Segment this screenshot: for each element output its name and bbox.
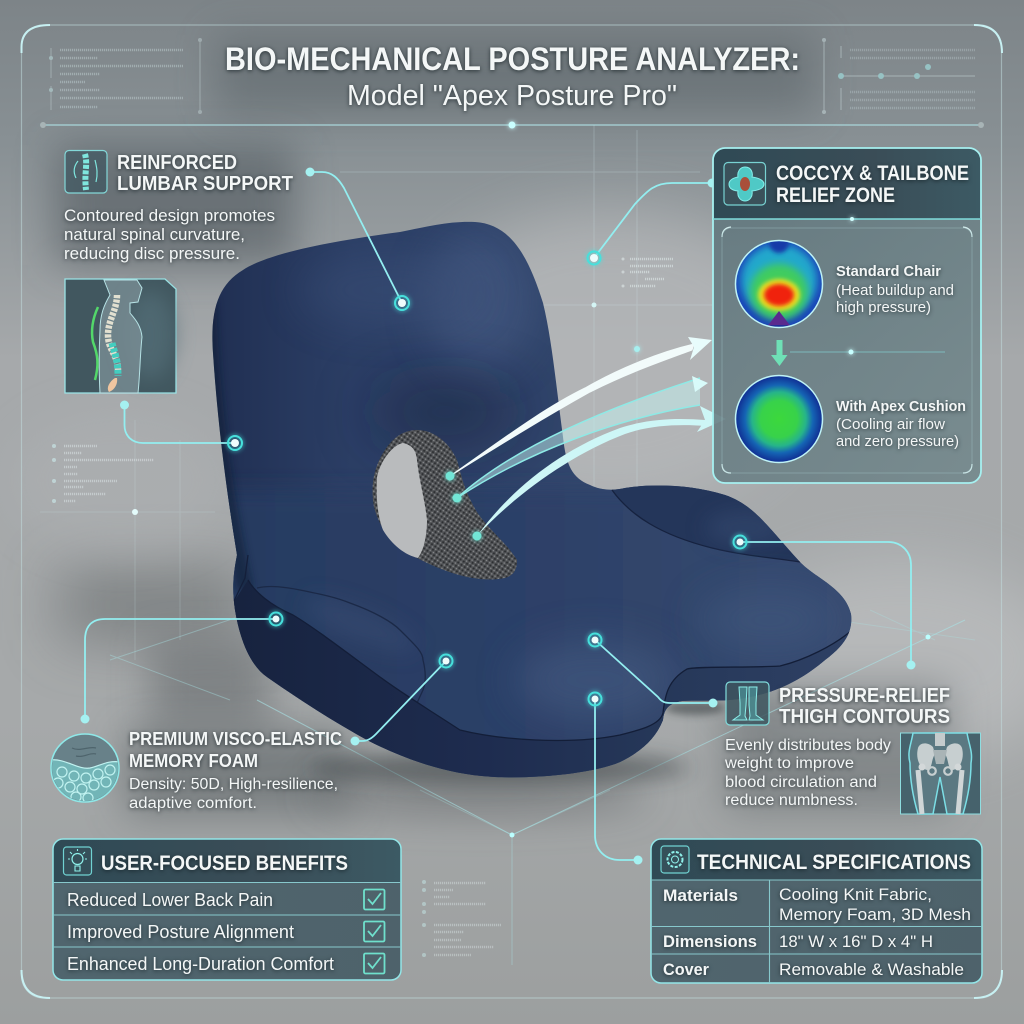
micro data block: upper right of chair (622, 258, 673, 288)
callout: reinforced lumbar support: Contoured design promotes (64, 207, 275, 225)
icon: gear (661, 846, 689, 873)
mesh cutout (373, 430, 517, 579)
arrow: upper white airflow (450, 337, 712, 476)
panel: technical specifications: Memory Foam, 3D Mesh (779, 905, 971, 924)
panel: coccyx and tailbone relief zone (713, 148, 981, 483)
micro data block: bottom centre (422, 880, 501, 957)
grid lines and floor guide lines (40, 125, 975, 965)
icon: legs (726, 682, 769, 725)
micro data block: top left (49, 38, 202, 114)
callout: pressure-relief thigh contours (724, 682, 980, 814)
micro data block: top right (822, 38, 975, 114)
panel: technical specifications: Materials (663, 886, 738, 905)
panel: user-focused benefits: Enhanced Long-Duration Comfort (67, 954, 334, 974)
callout: premium memory foam (50, 729, 342, 812)
callout: reinforced lumbar support: reducing disc pressure. (64, 245, 240, 263)
connector lines (85, 172, 911, 860)
product: seat cushion chair (200, 222, 900, 800)
panel: coccyx and tailbone relief zone: RELIEF ZONE (776, 184, 895, 207)
panel: user-focused benefits (53, 839, 401, 980)
panel: technical specifications: Cover (663, 960, 709, 979)
illustration: spine side view (65, 279, 176, 393)
callout: premium memory foam: PREMIUM VISCO-ELASTIC (129, 729, 342, 749)
callout: reinforced lumbar support: natural spinal curvature, (64, 226, 245, 244)
icon: tailbone zone (724, 162, 766, 205)
icon: light bulb (64, 847, 92, 875)
arrow origin points (446, 472, 482, 540)
callout: reinforced lumbar support: REINFORCED (117, 152, 237, 174)
callout: pressure-relief thigh contours: reduce numbness. (725, 792, 858, 809)
divider glow (790, 350, 945, 354)
callout: premium memory foam: Density: 50D, High-resilience, (129, 776, 338, 793)
title: Model "Apex Posture Pro" (347, 80, 677, 112)
title (225, 41, 800, 112)
panel: coccyx and tailbone relief zone: (Heat buildup and (836, 283, 954, 299)
panel: technical specifications (651, 839, 982, 983)
panel: technical specifications: Removable & Washable (779, 960, 964, 979)
panel: user-focused benefits: Reduced Lower Back Pain (67, 890, 273, 910)
illustration: pelvis x-ray (900, 733, 980, 814)
panel: coccyx and tailbone relief zone: and zero pressure) (836, 434, 959, 450)
callout: premium memory foam: MEMORY FOAM (129, 751, 258, 771)
panel: coccyx and tailbone relief zone: (Cooling air flow (836, 417, 946, 433)
callout: pressure-relief thigh contours: THIGH CONTOURS (779, 706, 950, 728)
micro data block: left middle (52, 444, 154, 503)
panel: user-focused benefits: USER-FOCUSED BENEFITS (101, 852, 348, 875)
title: BIO-MECHANICAL POSTURE ANALYZER: (225, 41, 800, 77)
arrow: lower cyan airflow (477, 406, 726, 536)
panel: technical specifications: TECHNICAL SPECIFICATIONS (697, 851, 971, 874)
panel: coccyx and tailbone relief zone: high pressure) (836, 300, 931, 316)
icon: foam layers (50, 734, 120, 805)
arrow: translucent airflow band (457, 376, 708, 498)
heat map: standard chair (734, 240, 824, 328)
panel: technical specifications: 18" W x 16" D x 4" H (779, 932, 933, 951)
panel: user-focused benefits: Improved Posture Alignment (67, 922, 294, 942)
icon: spine (65, 150, 107, 193)
callout: reinforced lumbar support: LUMBAR SUPPORT (117, 173, 293, 195)
glowing hotspots (80, 168, 916, 864)
callout: pressure-relief thigh contours: blood circulation and (725, 774, 877, 791)
heat map: with apex cushion (736, 376, 822, 462)
icon: check boxes (364, 890, 384, 974)
airflow arrows (446, 337, 726, 540)
arrow: standard to cushion (771, 340, 788, 366)
callout: pressure-relief thigh contours: Evenly distributes body (725, 737, 891, 754)
callout: reinforced lumbar support (64, 150, 293, 393)
panel: technical specifications: Dimensions (663, 932, 757, 951)
callout: pressure-relief thigh contours: weight to improve (724, 755, 854, 772)
panel: coccyx and tailbone relief zone: With Apex Cushion (836, 399, 966, 415)
callout: pressure-relief thigh contours: PRESSURE-RELIEF (779, 685, 950, 707)
panel: coccyx and tailbone relief zone: Standard Chair (836, 264, 941, 280)
panel: technical specifications: Cooling Knit Fabric, (779, 885, 932, 904)
callout: premium memory foam: adaptive comfort. (129, 795, 257, 812)
panel: coccyx and tailbone relief zone: COCCYX & TAILBONE (776, 162, 969, 185)
